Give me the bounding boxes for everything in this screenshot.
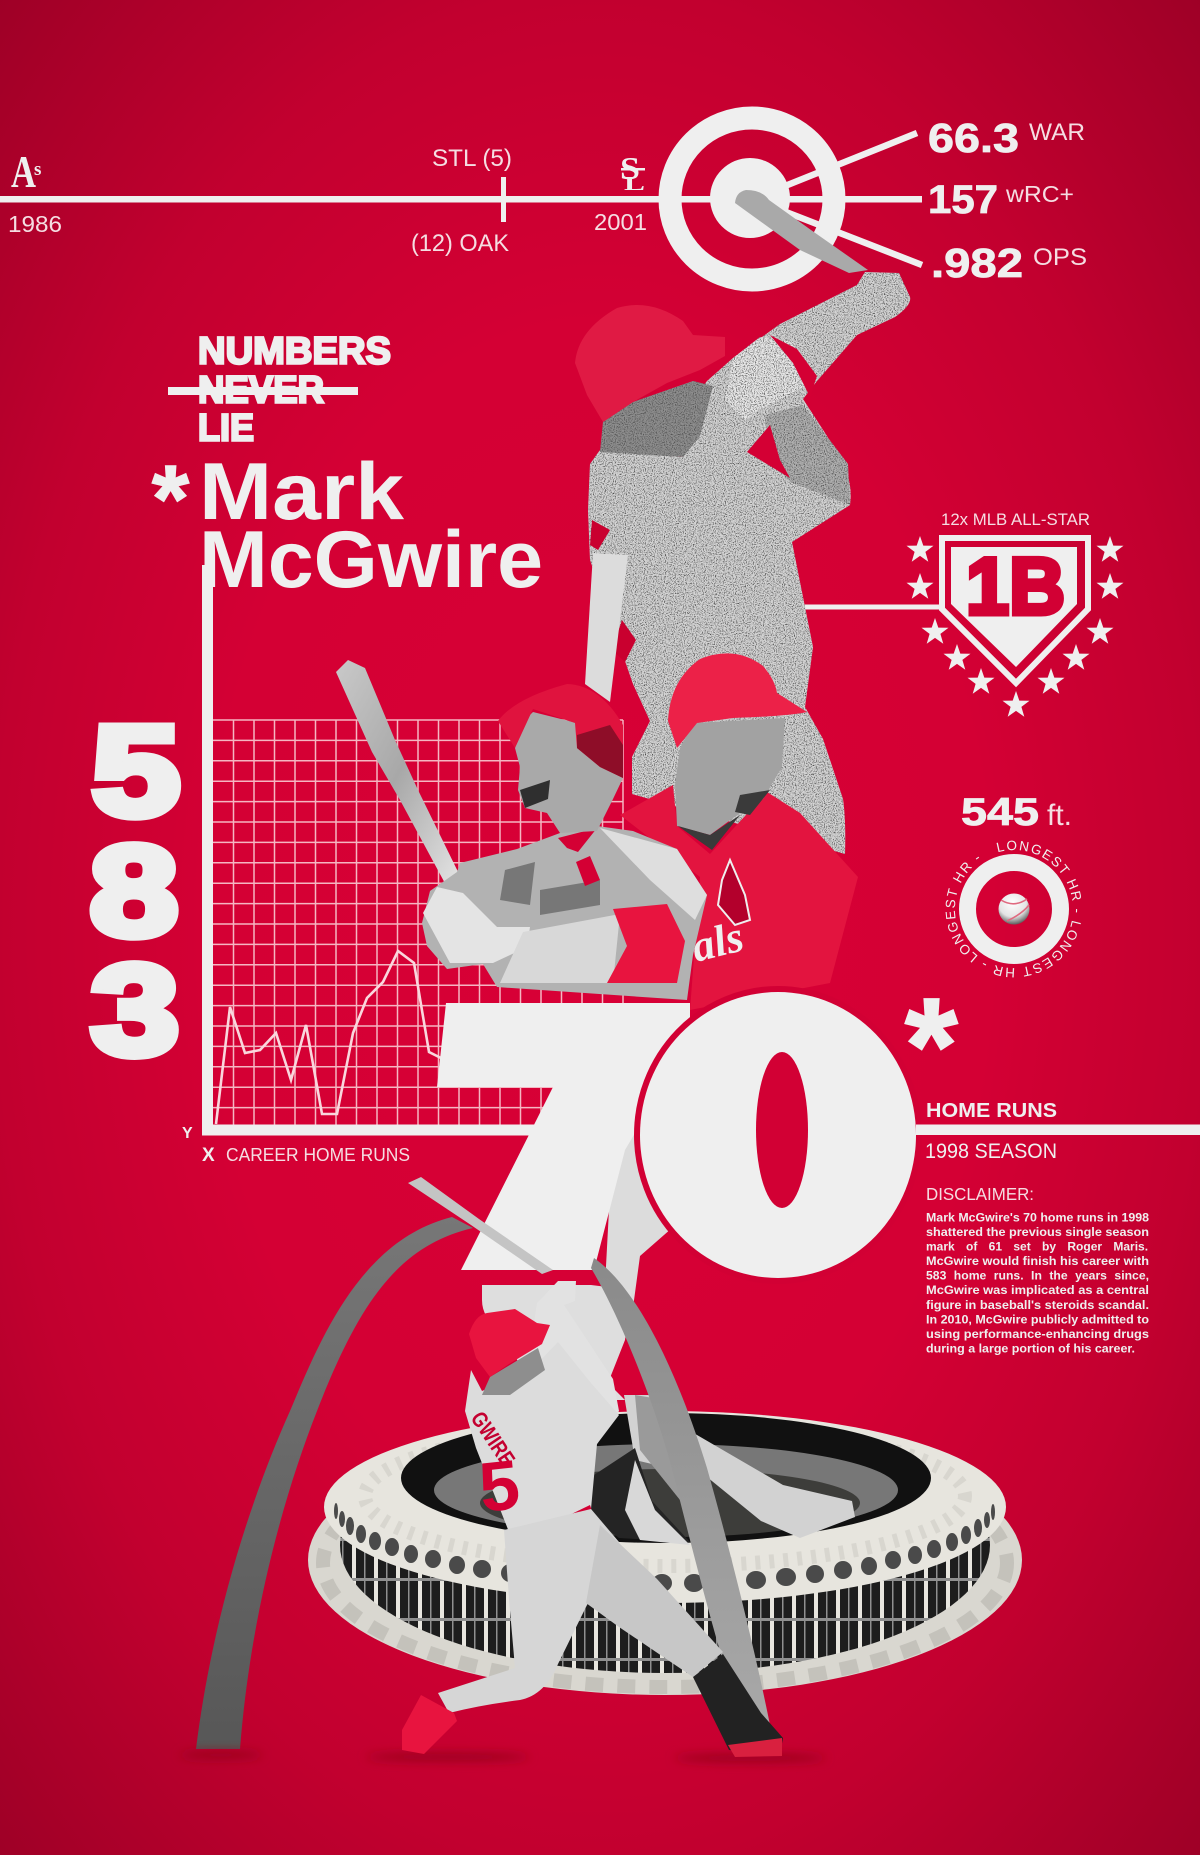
ring text: LONGEST HR - LONGEST HR - LONGEST HR - bbox=[946, 840, 1081, 978]
digit 7 bbox=[437, 1003, 690, 1270]
chart axes bbox=[208, 565, 540, 1130]
title: mark mcgwire: * bbox=[152, 446, 189, 552]
icon: cardinals logo: S bbox=[620, 150, 640, 186]
batter glove bbox=[725, 337, 807, 420]
heading: numbers never lie: NEVER bbox=[198, 370, 324, 412]
helmet shadow bbox=[577, 725, 623, 778]
stats bbox=[928, 115, 1087, 286]
icon: athletics logo: s bbox=[34, 159, 41, 180]
disclaimer: DISCLAIMER: bbox=[926, 1184, 1034, 1204]
stat: WAR bbox=[928, 115, 1085, 161]
jersey shadow bbox=[500, 862, 600, 915]
photo: center batter bbox=[336, 660, 707, 1000]
disclaimer body: McGwire was implicated as a central bbox=[926, 1283, 1149, 1297]
longest home run bbox=[946, 791, 1081, 978]
leg in gap between 7 and 0 bbox=[605, 1130, 680, 1315]
labels: home runs, 1998 season bbox=[916, 1100, 1200, 1163]
big number: 583: 3 bbox=[91, 939, 179, 1082]
team script: als bbox=[687, 912, 748, 972]
digit 0 bbox=[640, 992, 916, 1278]
ring bbox=[968, 862, 1060, 956]
torso bbox=[422, 826, 707, 1000]
boot cleat bbox=[728, 1738, 782, 1757]
rear leg bbox=[586, 1525, 723, 1677]
connector line to badge bbox=[800, 604, 942, 610]
base ring stripes bbox=[323, 1439, 1007, 1687]
icon: cardinals logo bbox=[620, 150, 645, 195]
icon: athletics logo: A bbox=[11, 146, 36, 197]
stat: OPS: OPS bbox=[1033, 244, 1087, 271]
batter jersey number bbox=[590, 520, 636, 662]
top bat bbox=[735, 190, 868, 273]
disclaimer body: 583 home runs. In the years since, bbox=[926, 1269, 1149, 1283]
hands bbox=[423, 887, 530, 963]
stat: WAR: WAR bbox=[1029, 119, 1085, 146]
disclaimer body: McGwire would finish his career with bbox=[926, 1254, 1149, 1268]
disclaimer body: using performance-enhancing drugs bbox=[926, 1327, 1149, 1341]
stat: OPS: .982 bbox=[931, 240, 1023, 286]
front leg bbox=[624, 1395, 855, 1538]
batter wristband bbox=[770, 335, 817, 397]
stat rays bbox=[780, 133, 922, 265]
big number: 70 bbox=[437, 992, 916, 1278]
disclaimer body: shattered the previous single season bbox=[926, 1225, 1149, 1239]
center bat bbox=[336, 660, 462, 887]
team script bbox=[687, 860, 750, 972]
disclaimer body: during a large portion of his career. bbox=[926, 1341, 1135, 1355]
left shoe bbox=[402, 1695, 457, 1754]
raised arms bbox=[530, 1281, 619, 1444]
heading: numbers never lie: LIE bbox=[198, 408, 254, 450]
distance: 545 ft: ft. bbox=[1047, 799, 1072, 832]
beard bbox=[520, 780, 550, 808]
front leg bbox=[438, 1509, 619, 1713]
timeline bbox=[0, 145, 922, 257]
batter cap bbox=[575, 305, 725, 422]
disclaimer body: mark of 61 set by Roger Maris. bbox=[926, 1240, 1148, 1254]
shadow lower leg bbox=[635, 1395, 700, 1500]
vertical bat bbox=[585, 553, 628, 702]
jersey name and number: GWIRE bbox=[466, 1407, 520, 1471]
timeline label: 1986: 1986 bbox=[8, 211, 62, 237]
big number: 583 bbox=[90, 700, 180, 1082]
roof arches bbox=[334, 1503, 995, 1592]
photo: top batter bbox=[575, 190, 910, 854]
belt bbox=[555, 1505, 595, 1535]
stat: wRC+ bbox=[928, 178, 1074, 222]
big number: 583: 8 bbox=[90, 820, 178, 963]
badge label: 12x MLB ALL-STAR bbox=[941, 511, 1090, 529]
disclaimer bbox=[926, 1184, 1149, 1355]
timeline label: (12) OAK: (12) OAK bbox=[411, 230, 509, 257]
batter sleeve shadow bbox=[765, 405, 850, 505]
distance: 545 ft bbox=[961, 791, 1072, 834]
jersey bbox=[465, 1342, 619, 1532]
batter stippled silhouette bbox=[588, 272, 910, 854]
ground shadows bbox=[180, 1752, 826, 1762]
stat: OPS bbox=[931, 240, 1087, 286]
disclaimer body: Mark McGwire's 70 home runs in 1998 bbox=[926, 1210, 1149, 1224]
labels: home runs, 1998 season: 1998 SEASON bbox=[925, 1140, 1057, 1163]
head bbox=[482, 1348, 545, 1395]
heading: numbers never lie bbox=[168, 330, 391, 450]
stat: wRC+: wRC+ bbox=[1005, 181, 1074, 207]
roof ribs bbox=[365, 1426, 965, 1566]
stadium field bbox=[480, 1469, 860, 1537]
helmet bbox=[668, 653, 807, 748]
face bbox=[515, 712, 623, 833]
title: mark mcgwire: McGwire bbox=[199, 515, 543, 605]
boot bbox=[693, 1654, 783, 1754]
labels: home runs, 1998 season: HOME RUNS bbox=[926, 1100, 1057, 1122]
stadium base ring bbox=[308, 1425, 1022, 1695]
lower bat bbox=[408, 1177, 553, 1274]
icon: baseball bbox=[998, 894, 1030, 924]
arch: right leg bbox=[591, 1258, 770, 1725]
1B: 1B bbox=[966, 542, 1065, 632]
rear thigh bbox=[482, 1285, 632, 1400]
glove bbox=[591, 1448, 690, 1542]
photo: leg and glove behind lower batter bbox=[482, 1285, 855, 1545]
timeline label: STL (5): STL (5) bbox=[432, 145, 512, 172]
stadium crowd bbox=[434, 1444, 898, 1536]
timeline label: 2001: 2001 bbox=[594, 209, 647, 235]
stadium bowl bbox=[401, 1413, 931, 1543]
batter body and arms bbox=[588, 272, 910, 854]
helmet bbox=[498, 684, 623, 778]
photo: lower batter bbox=[402, 1177, 783, 1757]
home plate bbox=[951, 547, 1077, 667]
sleeve highlight bbox=[600, 828, 707, 920]
stat: wRC+: 157 bbox=[928, 178, 998, 222]
disclaimer body bbox=[926, 1210, 1149, 1355]
badge: 1B all-star bbox=[907, 511, 1124, 717]
jersey name and number bbox=[466, 1407, 523, 1527]
beard and undershirt bbox=[678, 790, 770, 850]
collar and bird bbox=[558, 828, 600, 886]
photo: batter in red jersey bbox=[620, 653, 858, 1010]
line chart: career home runs bbox=[182, 565, 623, 1166]
hole between arms bbox=[747, 425, 790, 478]
chart grid bbox=[213, 720, 623, 1125]
home plate outline bbox=[942, 538, 1088, 683]
axis label: Y: Y bbox=[182, 1125, 193, 1142]
big asterisk: * bbox=[905, 970, 958, 1121]
target bbox=[670, 118, 922, 280]
forearm bbox=[500, 914, 620, 983]
jersey name and number: 5 bbox=[475, 1445, 523, 1527]
disclaimer body: In 2010, McGwire publicly admitted to bbox=[926, 1312, 1149, 1326]
jersey bbox=[620, 785, 858, 1010]
batter head bbox=[600, 381, 713, 457]
face bbox=[675, 718, 785, 835]
stadium wall bbox=[340, 1536, 990, 1673]
stars bbox=[907, 536, 1124, 717]
icon: cardinals logo: L bbox=[624, 173, 645, 195]
wrist guard bbox=[607, 904, 685, 983]
distance: 545 ft: 545 bbox=[961, 791, 1039, 834]
chart data line bbox=[216, 951, 445, 1124]
stadium roof bbox=[324, 1411, 1006, 1603]
axis label: career home runs: CAREER HOME RUNS bbox=[226, 1144, 410, 1165]
disclaimer body: figure in baseball's steroids scandal. bbox=[926, 1298, 1149, 1312]
stat: WAR: 66.3 bbox=[928, 115, 1019, 161]
axis label: X: X bbox=[202, 1145, 215, 1166]
helmet bbox=[469, 1309, 550, 1377]
arch: left leg bbox=[196, 1217, 473, 1749]
big number: 583: 5 bbox=[92, 700, 180, 843]
title: mark mcgwire bbox=[152, 446, 543, 605]
heading: numbers never lie: NUMBERS bbox=[198, 330, 391, 372]
photo: busch stadium bbox=[308, 1411, 1022, 1695]
title: mark mcgwire: Mark bbox=[199, 447, 405, 537]
